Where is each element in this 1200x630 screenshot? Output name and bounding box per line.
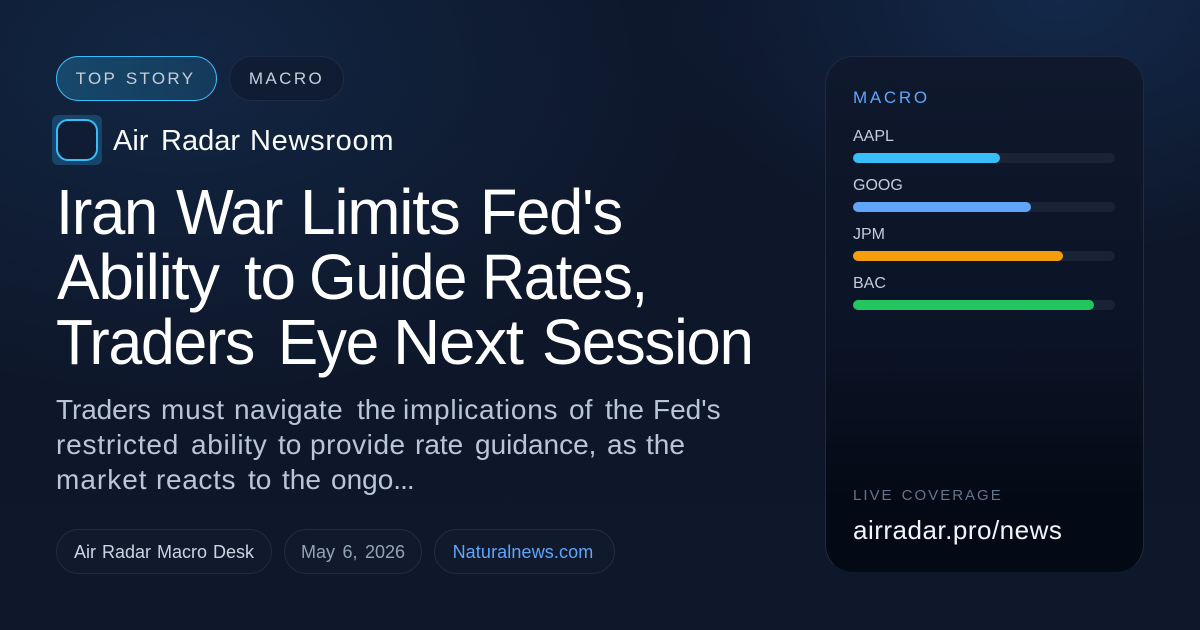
tag: macro: MACRO [249,68,324,88]
brand name: Newsroom [250,125,394,157]
summary text: restricted [56,429,179,460]
meta pill: date: May 6, 2026 [301,542,405,562]
summary text [56,394,721,495]
summary text: ability [191,429,268,460]
headline: Session [542,306,753,378]
summary text: must [161,394,225,425]
headline: Fed's [480,176,622,248]
summary text: to [248,464,271,495]
bar row: AAPL [853,128,1115,163]
summary text: market [56,464,148,495]
summary text: implications [403,394,558,425]
headline: to [244,241,295,313]
brand name [113,125,394,157]
headline: Ability [57,241,219,313]
meta pill: source: Naturalnews.com [453,542,593,562]
summary text: rate [415,429,463,460]
summary text: of [569,394,592,425]
brand name: Radar [161,125,240,157]
panel: macro sidebar [825,56,1144,573]
bar row: GOOG: GOOG [853,177,903,194]
headline: War [176,176,282,248]
bar row: JPM: JPM [853,226,885,243]
summary text: the [605,394,644,425]
bar row: GOOG [853,177,1115,212]
meta pill: desk: Air Radar Macro Desk [74,542,254,562]
bar row: BAC: BAC [853,275,886,292]
summary text: as [607,429,637,460]
summary text: ongo... [331,464,414,495]
bar row: JPM [853,226,1115,261]
meta pill: desk [56,529,272,574]
headline: Eye [278,306,378,378]
headline: Rates, [482,241,647,313]
headline [56,176,753,378]
bar row: BAC [853,275,1115,310]
tag: top story [56,56,217,101]
summary text: the [282,464,321,495]
panel heading: MACRO [853,88,930,107]
brand name: Air [113,125,148,157]
headline: Guide [309,241,466,313]
summary text: guidance, [475,429,596,460]
summary text: to [278,429,301,460]
tag: top story: TOP STORY [76,68,195,88]
bar row: AAPL: AAPL [853,128,894,145]
coverage label: LIVE COVERAGE [853,487,1003,504]
headline: Iran [56,176,157,248]
headline: Traders [56,306,254,378]
summary text: the [357,394,396,425]
summary text: the [646,429,685,460]
summary text: navigate [234,394,343,425]
summary text: Fed's [653,394,721,425]
meta pill: source [434,529,615,574]
coverage url: airradar.pro/news [853,515,1062,545]
meta pill: date [284,529,422,574]
tag: macro [229,56,344,101]
summary text: Traders [56,394,151,425]
logo icon [52,115,102,165]
headline: Next [393,306,523,378]
summary text: provide [310,429,406,460]
headline: Limits [300,176,459,248]
summary text: reacts [156,464,236,495]
